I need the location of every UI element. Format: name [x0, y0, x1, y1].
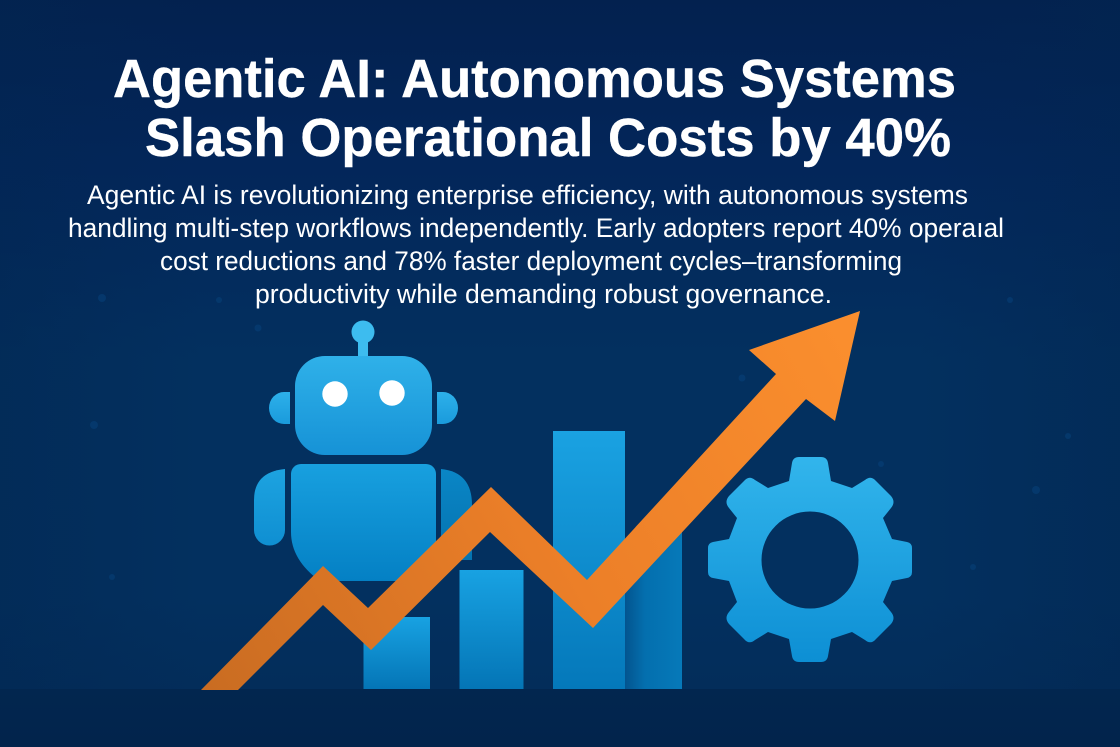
robot torso [291, 464, 436, 581]
description text: Agentic AI is revolutionizing enterprise efficiency, with autonomous systems [87, 180, 968, 210]
robot ears [269, 392, 458, 424]
robot head [295, 356, 432, 455]
description text: cost reductions and 78% faster deployment cycles–transforming [160, 246, 902, 276]
bar chart [364, 431, 682, 689]
description text [68, 180, 1004, 309]
icon: gear [708, 457, 912, 662]
title: Agentic AI: Autonomous Systems [113, 49, 956, 109]
robot eyes [322, 380, 405, 407]
robot arms [254, 469, 472, 560]
title [113, 49, 956, 168]
arrow: rising trend [201, 311, 860, 690]
robot antenna [352, 320, 374, 358]
icon: robot [254, 320, 472, 581]
description text: productivity while demanding robust governance. [255, 279, 832, 309]
description text: handling multi-step workflows independently. Early adopters report 40% operaıal [68, 213, 1004, 243]
title: Slash Operational Costs by 40% [145, 108, 951, 168]
